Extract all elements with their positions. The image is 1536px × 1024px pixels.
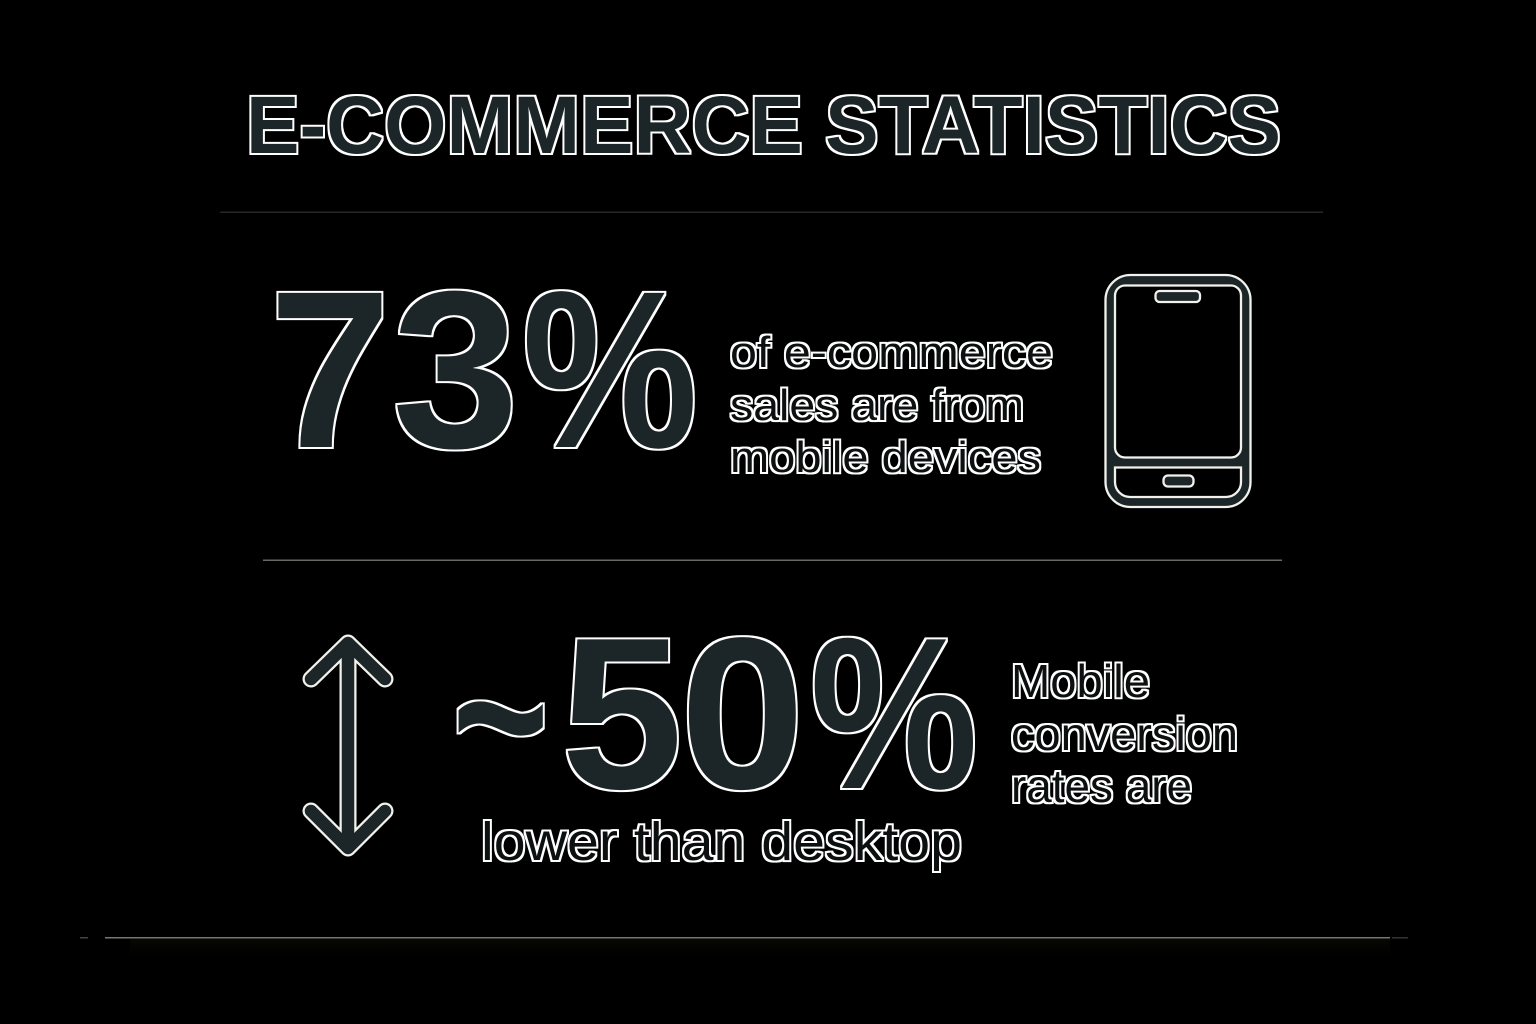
stat: ~50%: ~ [452, 594, 549, 836]
stat: 73%: 7 [269, 245, 391, 495]
icon: double-headed vertical arrow [311, 643, 385, 848]
panel: mobile conversion statistic [311, 592, 1238, 872]
text block: lower than desktop: lower than desktop [481, 812, 962, 872]
title: E-COMMERCE STATISTICS [246, 80, 1281, 171]
text block: mobile sales description: mobile devices [730, 433, 1041, 482]
icon: smartphone [1106, 275, 1250, 507]
stat: ~50%: 0 [680, 592, 805, 834]
stat: 73%: % [522, 245, 698, 495]
stat: ~50%: % [810, 592, 978, 834]
text block: mobile sales description: sales are from [730, 381, 1024, 430]
text block: conversion description: rates are [1011, 760, 1192, 812]
panel: mobile sales statistic [269, 245, 1250, 507]
text block: mobile sales description [730, 328, 1053, 482]
stat: ~50%: 5 [561, 592, 683, 834]
text block: conversion description: Mobile [1011, 655, 1150, 707]
text block: conversion description: conversion [1011, 708, 1238, 760]
text block: mobile sales description: of e-commerce [730, 328, 1053, 377]
stat: 73%: 3 [392, 245, 519, 495]
text block: conversion description [1011, 655, 1238, 812]
